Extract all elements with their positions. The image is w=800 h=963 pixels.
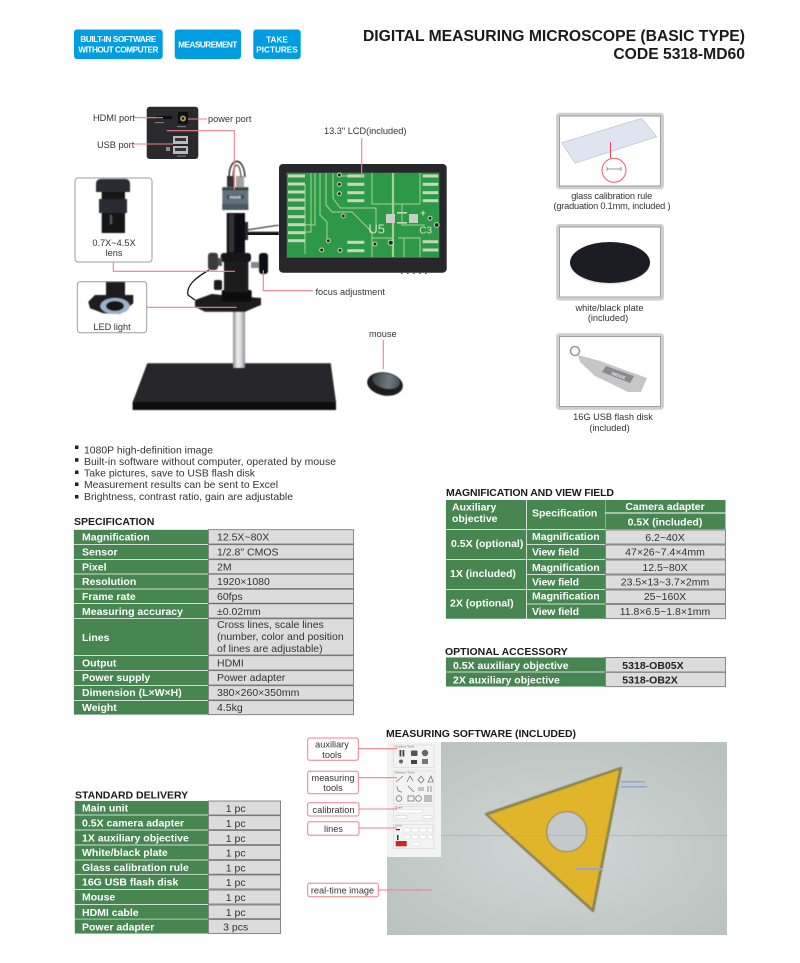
row group: 2X optional: 25~160X [644,591,686,603]
title [363,28,745,63]
row: output: Output [82,658,117,670]
row: output [74,656,354,670]
row group: 1X included: View field [532,576,579,588]
callout: auxiliary tools: tools [322,750,342,760]
row: white/black plate: White/black plate [82,847,168,859]
row group: 1X included: 23.5×13~3.7×2mm [621,576,709,588]
row: measuring accuracy: ±0.02mm [217,606,261,618]
icon: camera: INSIZE [230,196,242,200]
row group: 2X optional: 2X (optional) [450,598,514,610]
row: lines: Lines [82,632,110,644]
row: mouse [75,890,280,904]
tool panel [387,742,441,857]
label: focus adjustment: focus adjustment [316,287,385,297]
lines controls: Lines [395,824,403,828]
row: 0.5X auxiliary objective [446,658,726,672]
accessory panel: USB flash disk: (included) [589,423,630,433]
row: resolution [74,574,354,588]
bullet 4: Measurement results can be sent to Excel [84,480,278,491]
workpiece: yellow triangle insert [486,768,621,911]
row: main unit: 1 pc [226,803,246,815]
icon: LCD monitor: + [420,208,426,218]
row: USB flash disk: 16G USB flash disk [82,877,178,889]
callout: lines: lines [324,824,343,834]
row: camera adapter [75,816,280,830]
row: auxiliary objective: 1 pc [226,833,246,845]
label: HDMI port: HDMI port [93,113,135,123]
inset: LED light [77,282,147,333]
row: glass calibration rule: Glass calibration rule [82,862,189,874]
row: resolution: 1920×1080 [217,576,270,588]
row: pixel: 2M [217,562,232,574]
callout: lines [308,822,359,835]
accessory panel: white/black plate [558,226,662,323]
table: magnification and view field [446,500,726,619]
row group: 1X included [446,560,726,589]
row: frame rate: Frame rate [82,591,136,603]
row: weight [74,701,354,715]
table: standard delivery [74,801,280,934]
bullet 3: Take pictures, save to USB flash disk [84,468,256,480]
row: glass calibration rule [75,860,280,874]
row: pixel [74,560,354,574]
accessory panel: glass calibration rule [554,114,670,211]
label: power port: power port [208,114,252,124]
header: camera adapter [606,500,726,513]
accessory panel: white/black plate: (included) [588,313,628,323]
icon: LCD monitor: U5 [368,222,385,236]
title: CODE 5318-MD60 [613,46,745,63]
row: power supply [74,671,354,685]
badge: take pictures: PICTURES [256,46,298,54]
row: mouse: 1 pc [226,892,246,904]
title: DIGITAL MEASURING MICROSCOPE (BASIC TYPE) [363,28,745,45]
accessory panel: USB flash disk: 16G USB flash disk [573,412,653,422]
row: frame rate [74,589,354,603]
header: specification: Specification [532,508,597,520]
row: lines [74,619,354,655]
header: auxiliary objective: objective [452,513,498,525]
heading: standard delivery: STANDARD DELIVERY [75,790,188,802]
bullet 1: 1080P high-definition image [84,446,213,456]
measuring tools icons: Measure Tools [395,770,415,774]
row: HDMI cable [75,905,280,919]
label: mouse: mouse [369,329,397,339]
icon: port panel [147,107,198,159]
heading: specification: SPECIFICATION [74,516,154,528]
inset: lens [75,178,152,262]
row: power supply: Power adapter [217,672,286,684]
row group: 1X included: 1X (included) [450,568,516,580]
accessory panel: white/black plate: white/black plate [575,303,643,313]
table: specification [74,529,354,715]
heading: optional accessory: OPTIONAL ACCESSORY [445,646,568,658]
row: power adapter [75,920,280,934]
feature badges [74,30,301,59]
badge: measurement [175,30,241,59]
row: white/black plate: 1 pc [226,848,246,860]
icon: LCD monitor: C3 [419,226,433,236]
row group: 2X optional: 11.8×6.5~1.8×1mm [620,606,711,618]
row group: 2X optional [446,590,726,619]
callout: calibration [308,803,359,816]
row: magnification: 12.5X~80X [217,532,269,544]
row: weight: Weight [82,702,117,714]
row: camera adapter: 0.5X camera adapter [82,818,184,830]
row: 0.5X auxiliary objective: 0.5X auxiliary objective [453,660,569,672]
row: frame rate: 60fps [217,591,243,603]
row group: 2X optional: Magnification [532,590,600,602]
row: camera adapter: 1 pc [226,818,246,830]
callout lines [113,118,383,369]
row: power supply: Power supply [82,672,150,684]
accessory panel: USB flash disk [558,335,662,433]
header: 0.5X included [606,514,726,529]
row: weight: 4.5kg [217,702,243,714]
icon: focus body and knobs [208,213,268,292]
badge: built-in software: WITHOUT COMPUTER [78,46,158,54]
callout: measuring tools [308,771,358,794]
heading: measuring software: MEASURING SOFTWARE (INCLUDED) [386,728,576,740]
row: measuring accuracy: Measuring accuracy [82,606,183,618]
callout: auxiliary tools [308,738,358,760]
row: main unit: Main unit [82,802,129,814]
inset: lens: lens [106,248,123,258]
row: sensor [74,545,354,559]
measurement annotations [576,781,647,870]
calibration controls: Scale [395,806,403,810]
row group: 0.5X optional: Magnification [532,531,600,543]
row: mouse: Mouse [82,892,115,904]
row: 2X auxiliary objective [446,672,726,687]
header: specification [527,500,605,529]
badge: built-in software: BUILT-IN SOFTWARE [80,35,157,44]
row: magnification: Magnification [82,532,150,544]
callout: calibration: calibration [313,805,354,815]
row: dimension: Dimension (L×W×H) [82,687,182,699]
row: pixel: Pixel [82,562,107,574]
icon: camera [222,161,248,210]
software callouts [308,738,432,897]
row group: 1X included: Magnification [532,562,600,574]
badge: measurement: MEASUREMENT [178,40,237,50]
row: lines: of lines are adjustable) [217,643,323,655]
row: white/black plate [75,846,280,860]
software screenshot [387,742,727,935]
auxiliary tools icons: Auxiliary Tools [395,744,415,748]
microscope product photo with callouts [75,107,447,410]
PCB traces [305,173,425,257]
crosshair line [441,835,727,837]
row group: 0.5X optional: View field [532,546,579,558]
icon: mouse [365,370,405,398]
callout: real-time image: real-time image [311,886,374,896]
row: USB flash disk: 1 pc [226,877,246,889]
row group: 0.5X optional: 6.2~40X [645,532,685,544]
icon: LED ring holder [195,290,261,312]
row: magnification [74,530,354,544]
row: glass calibration rule: 1 pc [226,862,246,874]
row: HDMI cable: HDMI cable [82,907,139,919]
icon: pillar [233,311,245,368]
row: main unit [75,801,280,815]
row: power adapter: Power adapter [82,921,154,933]
callout: measuring tools: measuring [312,773,354,783]
header: auxiliary objective: Auxiliary [452,502,497,514]
bullet 2: Built-in software without computer, operated by mouse [84,457,336,468]
row: auxiliary objective: 1X auxiliary objective [82,833,189,845]
row: sensor: Sensor [82,546,118,558]
accessory panel: USB flash disk: INSIZE [611,371,626,380]
icon: monitor mount arm [247,225,279,234]
icon: base plate [133,363,336,410]
row: sensor: 1/2.8" CMOS [217,546,278,558]
header: camera adapter: Camera adapter [625,501,705,513]
label: LCD: 13.3" LCD(included) [324,126,406,136]
label: USB port: USB port [97,140,135,150]
heading: magnification and view field: MAGNIFICATION AND VIEW FIELD [446,487,614,499]
row group: 0.5X optional: 47×26~7.4×4mm [625,546,705,558]
badge: take pictures [253,30,301,59]
row group: 0.5X optional: 0.5X (optional) [451,538,523,550]
row: 0.5X auxiliary objective: 5318-OB05X [622,660,684,672]
row: HDMI cable: 1 pc [226,907,246,919]
row: dimension [74,686,354,700]
row: dimension: 380×260×350mm [217,687,300,699]
row: lines: (number, color and position [217,631,344,643]
row group: 1X included: 12.5~80X [642,562,688,574]
callout: auxiliary tools: auxiliary [315,740,349,750]
inset: LED light: LED light [93,322,131,332]
feature bullet list [75,446,336,503]
callout: measuring tools: tools [323,783,343,793]
row: output: HDMI [217,658,244,670]
row: auxiliary objective [75,830,280,845]
row group: 2X optional: View field [532,606,579,618]
callout: real-time image [308,883,378,897]
accessory panel: glass calibration rule: (graduation 0.1mm, included ) [554,201,670,211]
header: auxiliary objective [446,500,526,529]
header: 0.5X included: 0.5X (included) [628,516,702,528]
row: 2X auxiliary objective: 5318-OB2X [622,674,678,686]
row: measuring accuracy [74,604,354,618]
bullet 5: Brightness, contrast ratio, gain are adjustable [84,492,293,503]
row: USB flash disk [75,875,280,889]
accessory panel: glass calibration rule: glass calibration rule [571,191,652,201]
badge: take pictures: TAKE [266,36,288,44]
row: resolution: Resolution [82,576,136,588]
inset: lens: 0.7X~4.5X [92,238,136,248]
row group: 0.5X optional [446,530,726,559]
row: lines: Cross lines, scale lines [217,619,324,631]
badge: built-in software [74,30,163,59]
icon: LED cable [188,270,209,300]
icon: LCD monitor [279,164,447,274]
row: 2X auxiliary objective: 2X auxiliary objective [453,674,560,686]
table: optional accessory [446,657,726,687]
row: power adapter: 3 pcs [223,922,248,934]
